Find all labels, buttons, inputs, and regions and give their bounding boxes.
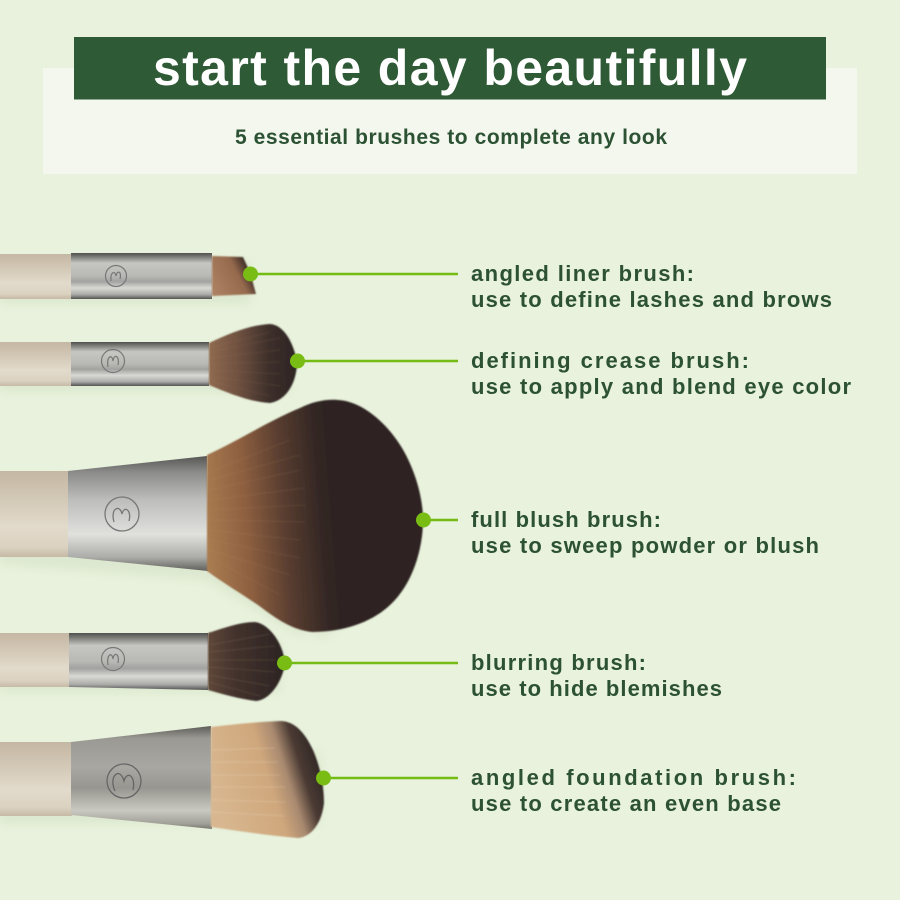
- callout: defining crease brush: [290, 348, 851, 399]
- ferrule: [71, 342, 209, 386]
- callout: blurring brush: [277, 650, 722, 701]
- callout: angled foundation brush: angled foundation brush:: [471, 765, 796, 790]
- bristles: [200, 395, 430, 640]
- callout: blurring brush: use to hide blemishes: [471, 676, 722, 701]
- logo: [102, 648, 124, 670]
- logo: [102, 350, 124, 372]
- callout: full blush brush: full blush brush:: [471, 507, 661, 532]
- ferrule: [71, 726, 212, 829]
- logo: [106, 266, 126, 286]
- brush: full blush: [0, 395, 430, 640]
- callout: angled liner brush: angled liner brush:: [471, 261, 694, 286]
- brush: angled foundation: [0, 718, 328, 840]
- callout: angled foundation brush: [316, 765, 796, 816]
- brush: blurring: [0, 618, 290, 706]
- handle: [0, 254, 71, 299]
- ferrule: [69, 633, 208, 690]
- subtitle: 5 essential brushes to complete any look: [235, 126, 667, 149]
- title banner: [74, 37, 826, 100]
- ferrule: [68, 456, 208, 571]
- handle: [0, 471, 69, 557]
- handle: [0, 633, 69, 687]
- ferrule: [71, 253, 212, 299]
- title: start the day beautifully: [153, 40, 747, 96]
- handle: [0, 342, 71, 386]
- logo: [105, 497, 139, 531]
- callout: blurring brush: blurring brush:: [471, 650, 646, 675]
- callout: angled liner brush: [243, 261, 832, 312]
- callout: defining crease brush: use to apply and blend eye color: [471, 374, 851, 399]
- callout: defining crease brush: defining crease brush:: [471, 348, 749, 373]
- bristles: [207, 620, 285, 702]
- logo: [107, 764, 141, 798]
- callout: angled liner brush: use to define lashes and brows: [471, 287, 832, 312]
- bristles: [208, 718, 328, 840]
- callout: full blush brush: [416, 507, 819, 558]
- callout: angled foundation brush: use to create an even base: [471, 791, 781, 816]
- subtitle panel: [43, 68, 857, 174]
- brush: angled liner: [0, 253, 256, 304]
- callout: full blush brush: use to sweep powder or blush: [471, 533, 819, 558]
- brush: defining crease: [0, 320, 300, 408]
- bristles: [212, 256, 256, 296]
- handle: [0, 742, 72, 816]
- bristles: [208, 323, 298, 404]
